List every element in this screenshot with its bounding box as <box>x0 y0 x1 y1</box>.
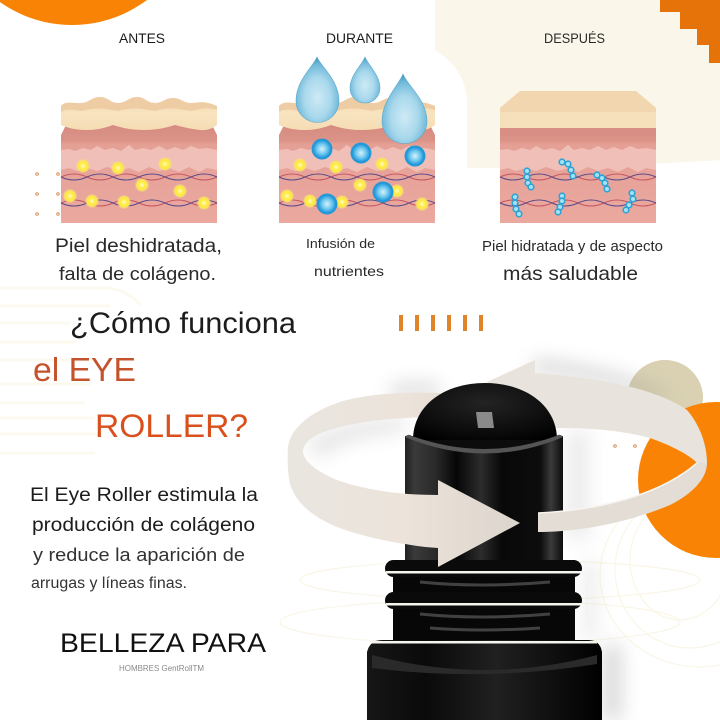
yellow cells <box>280 157 429 211</box>
neck rim <box>405 435 563 454</box>
body text: y reduce la aparición de <box>33 545 245 565</box>
orange tick marks <box>399 315 483 331</box>
collagen chains <box>512 159 636 217</box>
body text: arrugas y líneas finas. <box>31 575 187 592</box>
blue nutrient spheres <box>312 138 426 214</box>
water drops <box>296 57 427 144</box>
brand heading: BELLEZA PARA <box>60 628 266 658</box>
swirl arrow: front band and head <box>380 463 707 567</box>
body text: El Eye Roller estimula la <box>30 485 258 506</box>
brand subline: HOMBRES GentRollTM <box>119 663 204 673</box>
product: eye roller bottle <box>367 383 602 720</box>
thread ridges <box>385 560 582 577</box>
skin diagram: before <box>61 97 217 223</box>
skin diagram: after <box>500 91 656 223</box>
title: line 3: ROLLER? <box>95 408 248 444</box>
heading: ANTES: ANTES <box>119 30 165 46</box>
caption: after: más saludable <box>503 263 638 285</box>
epidermis top shading <box>279 97 435 112</box>
light edge <box>538 463 697 513</box>
body text <box>30 485 258 592</box>
thread reflections <box>420 582 550 630</box>
body text: producción de colágeno <box>32 514 255 536</box>
swirl arrow: back band <box>288 360 707 548</box>
epidermis upper tint <box>500 91 656 112</box>
faint background lines, left <box>0 288 140 453</box>
title: line 1: ¿Cómo funciona <box>70 307 296 340</box>
neck <box>397 437 572 575</box>
cream background blob <box>435 0 720 168</box>
caption: after: Piel hidratada y de aspecto <box>482 239 663 255</box>
heading: DURANTE: DURANTE <box>326 30 393 46</box>
neck interior behind ball <box>405 436 563 456</box>
heading: DESPUÉS: DESPUÉS <box>544 31 605 46</box>
skin diagram: during <box>279 57 435 223</box>
epidermis top shading <box>61 97 217 112</box>
caption: during <box>306 237 384 279</box>
soft shadows <box>305 358 675 720</box>
orange circle, top left <box>0 0 197 25</box>
epidermis, wrinkled <box>61 97 217 130</box>
faint background rings, right <box>280 483 720 667</box>
yellow cells <box>63 157 211 210</box>
caption: before: falta de colágeno. <box>59 264 216 284</box>
epidermis, smooth <box>500 91 656 128</box>
base <box>367 640 602 720</box>
caption: before <box>55 236 222 284</box>
caption: during: nutrientes <box>314 263 384 279</box>
caption: before: Piel deshidratada, <box>55 236 222 257</box>
ball highlight <box>476 412 494 428</box>
orange circle, right <box>638 402 720 558</box>
white ring lines <box>372 571 597 644</box>
caption: during: Infusión de <box>306 237 375 251</box>
epidermis <box>279 97 435 130</box>
title: line 2: el EYE <box>33 351 136 388</box>
caption: after <box>482 239 663 285</box>
tan circle <box>627 360 703 436</box>
thread core <box>393 560 575 645</box>
roller ball <box>413 383 557 440</box>
dark band <box>500 128 656 135</box>
orange stepped corner, top right <box>660 0 720 63</box>
small decorative dots, left <box>36 173 59 215</box>
small decorative dots, right <box>614 445 636 447</box>
base gloss <box>372 655 597 674</box>
